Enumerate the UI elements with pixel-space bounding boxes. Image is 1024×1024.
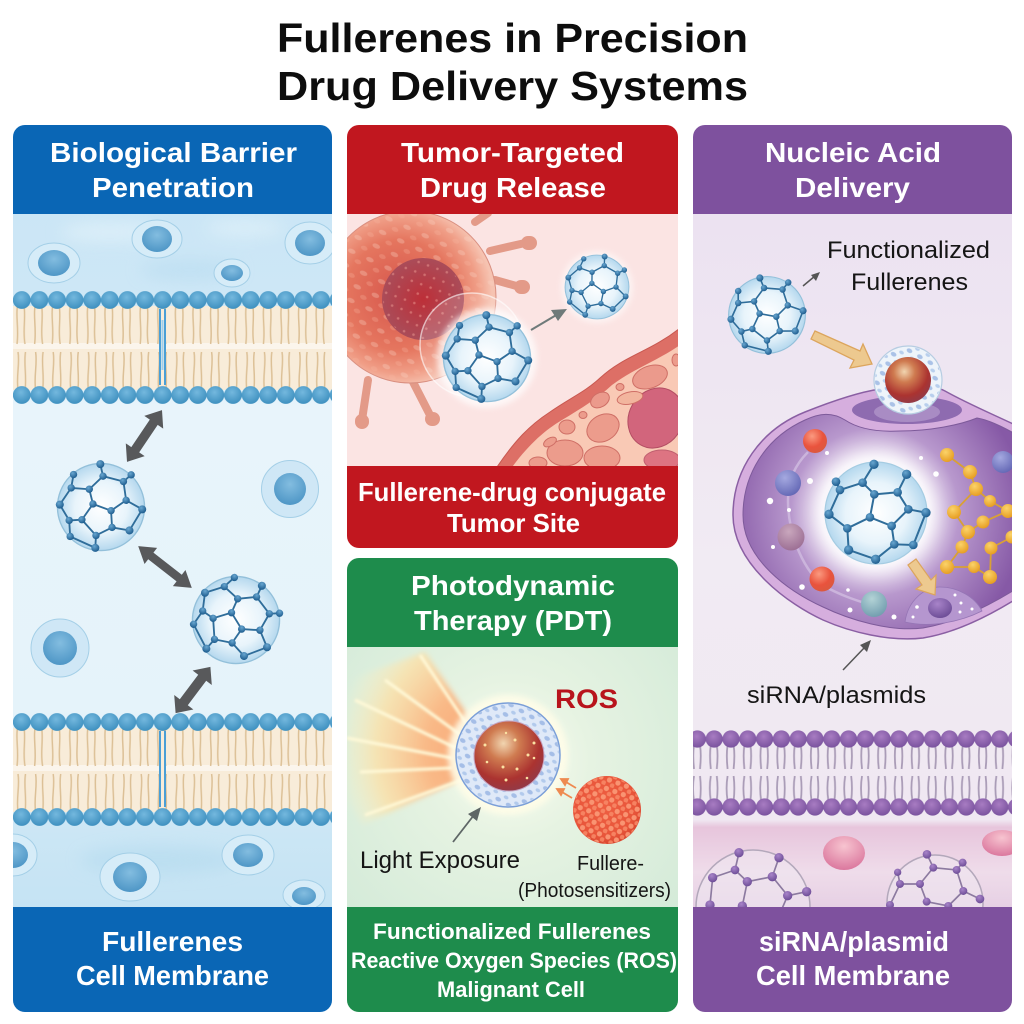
panel: nucleic acid delivery [693,125,1024,1012]
vesicles middle [31,460,318,677]
target cell [733,386,1024,639]
label: fullerene photosensitizers: (Photosensitizers) [518,880,671,902]
header: nucleic acid: Delivery [795,172,910,203]
cell interior [743,414,1024,629]
label: light exposure: Light Exposure [360,847,520,874]
header: tumor targeted: Tumor-Targeted [401,137,624,168]
panel: biological barrier penetration [0,125,335,1012]
lower fullerene right [886,850,984,951]
header: PDT: Photodynamic [411,570,615,601]
footer: siRNA cell membrane: Cell Membrane [756,960,950,991]
tumor illustration [347,214,678,466]
tumor cell [347,214,496,384]
label: functionalized fullerenes: Fullerenes [851,269,968,296]
label: functionalized fullerenes: Functionalized [827,237,990,264]
nuclear vesicle [905,587,982,624]
panel: tumor-targeted drug release [347,125,678,548]
yellow arrow to carrier [811,331,872,368]
label: ROS: ROS [555,684,618,714]
footer: PDT terms [347,907,678,1012]
footer: siRNA cell membrane: siRNA/plasmid [759,926,949,957]
panel: photodynamic therapy [347,558,678,1012]
glow [448,695,568,815]
mottled fluid top [72,220,269,871]
panel background [347,558,678,1012]
cell membrane outer [733,386,1024,639]
carrier nanoparticle [874,346,942,414]
header: PDT: Therapy (PDT) [414,605,612,636]
vesicles top [28,220,335,287]
intracellular fullerene [824,460,931,564]
small orange arrows [557,779,576,798]
header: biological barrier [13,125,332,214]
light rays [347,652,472,825]
title: Fullerenes in Precision [277,15,748,61]
arrow to free fullerene [531,309,567,330]
highlight ring [420,293,524,397]
conjugated fullerene [442,311,532,403]
footer: fullerenes cell membrane: Cell Membrane [76,960,269,991]
membrane upper [13,290,332,405]
vesicles bottom [0,834,325,910]
tumor spikes [362,213,530,422]
tissue vessel [497,329,678,466]
arrow 1 [126,410,164,462]
header: tumor targeted: Drug Release [420,172,606,203]
label: siRNA plasmids: siRNA/plasmids [747,682,926,709]
footer: conjugate tumor site: Fullerene-drug conjugate [358,477,666,507]
free fullerene [562,252,632,322]
ball glow [437,308,537,408]
arrow: light exposure [453,807,481,842]
white vesicle dots [767,451,939,620]
colored molecules [775,429,1014,617]
fullerene 2 [190,574,284,664]
panel background [13,125,332,1012]
footer: PDT terms: Malignant Cell [437,977,585,1002]
header: biological barrier: Penetration [92,172,254,203]
membrane lower [13,712,332,827]
header: tumor targeted [347,125,678,214]
photosensitizer sphere [573,776,641,844]
footer: siRNA cell membrane [693,907,1012,1012]
footer: fullerenes cell membrane: Fullerenes [102,926,243,957]
arrow 3 [174,666,212,714]
photosensitized fullerene [456,703,560,807]
purple membrane [693,729,1012,817]
cell entry pit [852,396,962,424]
footer: PDT terms: Reactive Oxygen Species (ROS) [351,948,677,973]
label: fullerene photosensitizers: Fullere- [577,853,644,875]
footer: PDT terms: Functionalized Fullerenes [373,919,651,944]
tumor nucleus [382,258,464,340]
yellow arrow inside cell [908,559,936,595]
footer: fullerenes cell membrane [13,907,332,1012]
panel background [693,214,1012,907]
pink vesicles [823,830,1022,870]
header: biological barrier: Biological Barrier [50,137,297,168]
title [277,15,748,109]
gold plasmid network [940,448,1018,584]
fullerene 1 [56,460,146,552]
header: PDT [347,558,678,647]
pointer arrow [803,272,820,286]
title: Drug Delivery Systems [277,63,748,109]
label: fullerene photosensitizers [518,853,671,902]
glow around cell fullerene [818,455,934,571]
pointer arrow: siRNA [843,640,871,670]
header: nucleic acid: Nucleic Acid [765,137,941,168]
header: nucleic acid [693,125,1012,214]
free fullerene [721,267,813,361]
lower fullerene left [696,848,811,964]
arrow 2 [138,546,192,588]
chain link [788,452,868,604]
footer: conjugate tumor site: Tumor Site [447,508,580,538]
panel background [347,214,678,466]
label: functionalized fullerenes [827,237,990,296]
footer: conjugate tumor site [347,466,678,548]
